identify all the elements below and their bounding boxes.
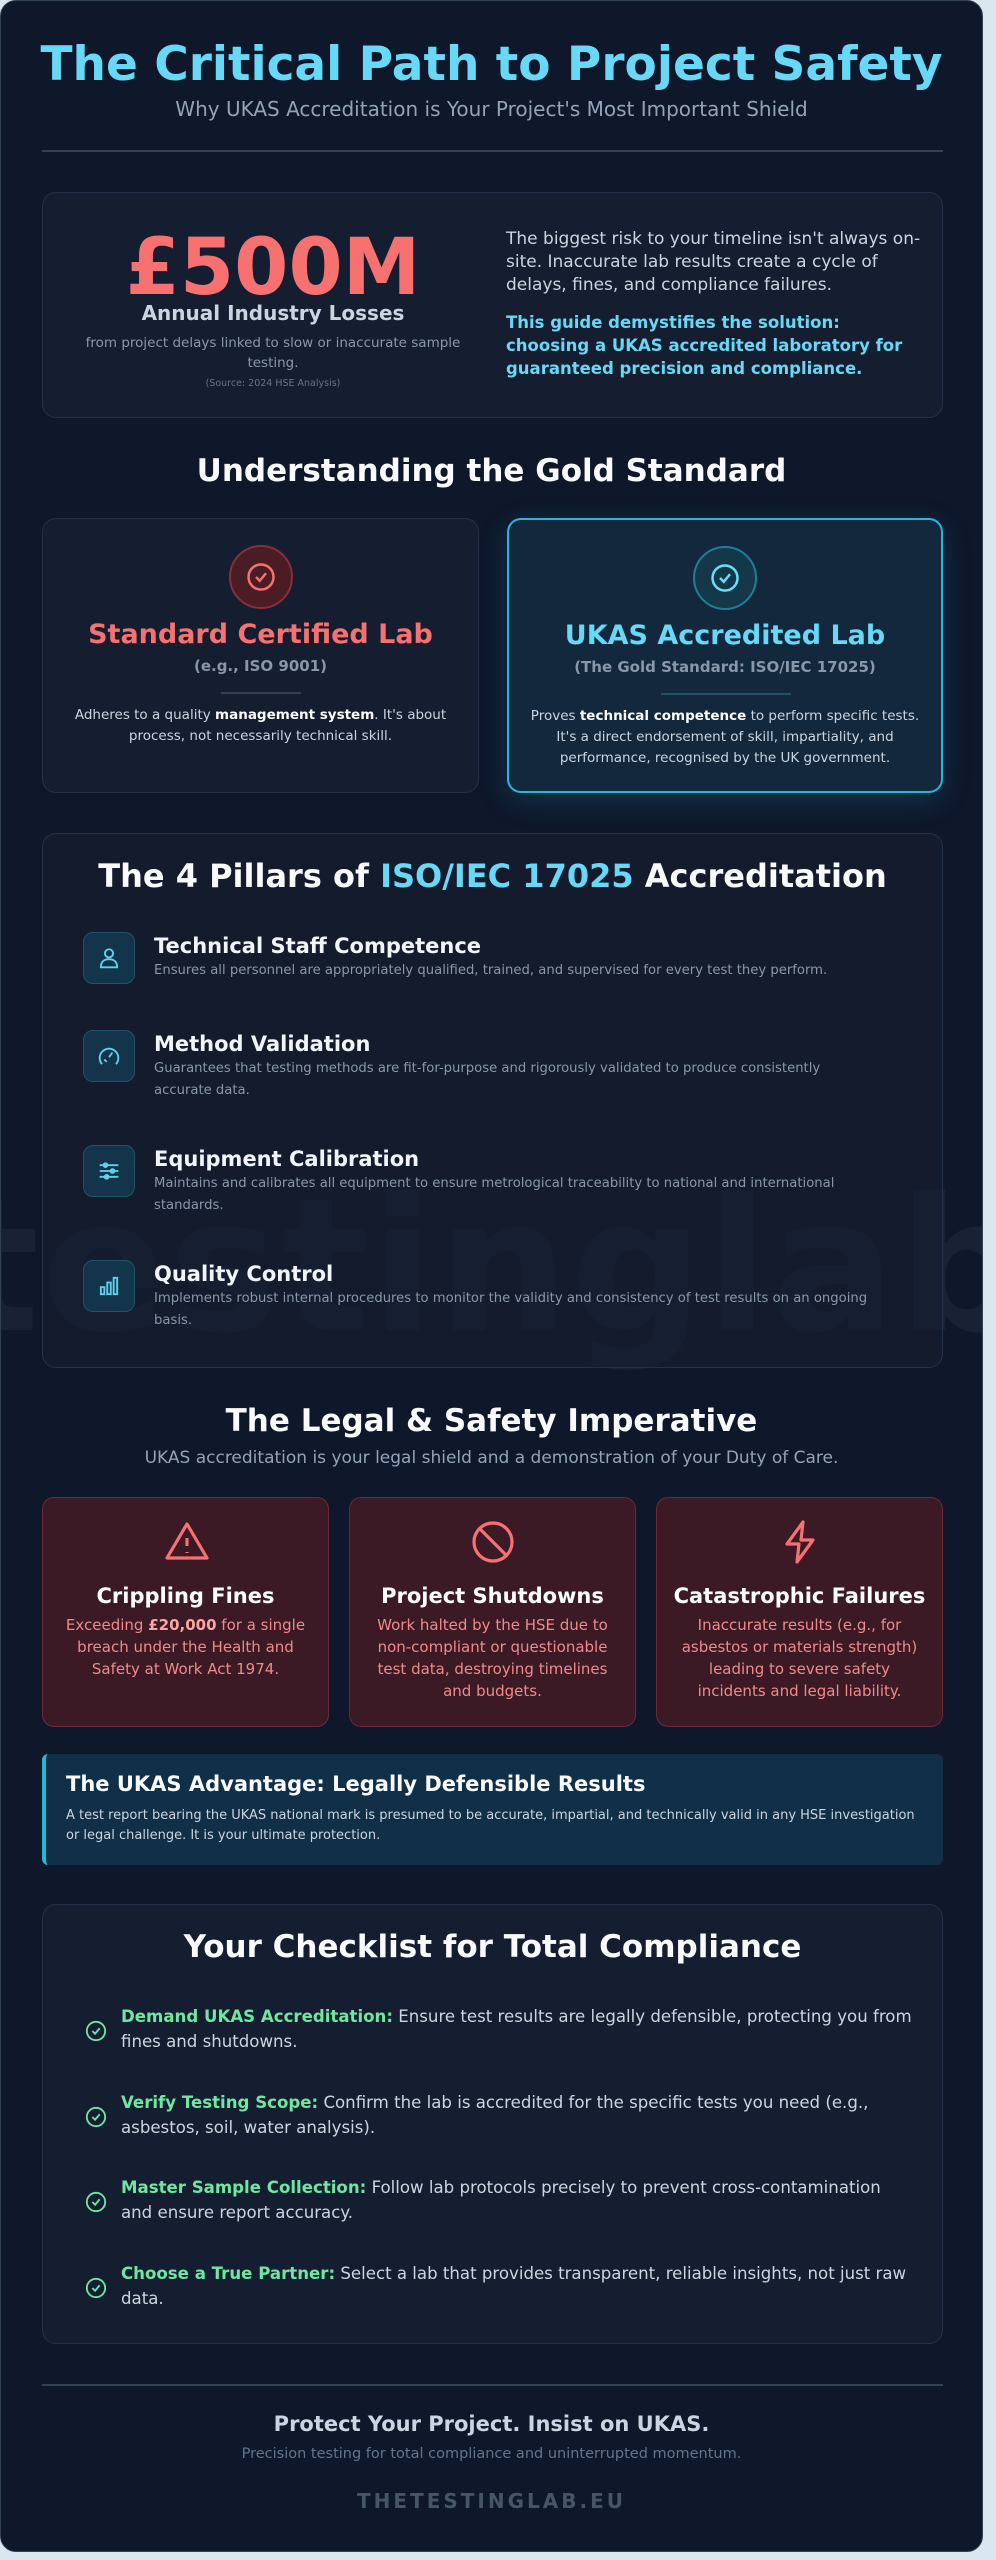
callout: UKAS advantage xyxy=(42,1754,943,1865)
heading: legal: The Legal & Safety Imperative xyxy=(226,1403,757,1439)
pillars heading: The 4 Pillars of ISO/IEC 17025 Accreditation xyxy=(98,857,887,895)
stat description: from project delays linked to slow or inaccurate sample testing. xyxy=(86,335,460,371)
stat: £500M: £500M xyxy=(126,223,420,313)
item 2: Verify Testing Scope: Confirm the lab is accredited for the specific tests you need (e.g., asbestos, soil, water analysis). xyxy=(121,2093,868,2137)
subtitle: Why UKAS Accreditation is Your Project's Most Important Shield xyxy=(175,97,808,121)
card: fines xyxy=(42,1497,329,1727)
icon: sliders xyxy=(83,1145,135,1197)
card: shutdowns: Project Shutdowns xyxy=(381,1584,604,1608)
pillar: staff xyxy=(83,932,827,984)
intro text: The biggest risk to your timeline isn't always on-site. Inaccurate lab results create a cycle of delays, fines, and compliance failures. xyxy=(506,229,920,295)
pillar: method xyxy=(83,1030,820,1098)
icon: lightning xyxy=(785,1520,815,1564)
card title: Standard Certified Lab xyxy=(88,619,433,650)
card: fines: Exceeding £20,000 for a single breach under the Health and Safety at Work Act 1974. xyxy=(66,1616,305,1678)
card title: UKAS Accredited Lab xyxy=(565,620,885,651)
source: (Source: 2024 HSE Analysis) xyxy=(206,378,340,389)
icon: red check xyxy=(229,545,293,609)
icon: gauge xyxy=(83,1030,135,1082)
pillar title: Technical Staff Competence xyxy=(154,934,481,958)
item 4: Choose a True Partner: Select a lab that provides transparent, reliable insights, not just raw data. xyxy=(121,2264,906,2308)
pillar title: Method Validation xyxy=(154,1032,370,1056)
pillar text: Maintains and calibrates all equipment to ensure metrological traceability to national and international standards. xyxy=(154,1176,834,1213)
icon: person xyxy=(83,932,135,984)
pillar: quality xyxy=(83,1260,867,1328)
card text: Adheres to a quality management system. It's about process, not necessarily technical skill. xyxy=(75,707,446,744)
icon: bars xyxy=(83,1260,135,1312)
heading: gold standard: Understanding the Gold Standard xyxy=(197,453,786,489)
icon: warning xyxy=(165,1522,209,1560)
panel: hero stat xyxy=(42,192,943,418)
card: failures: Catastrophic Failures xyxy=(674,1584,925,1608)
callout: UKAS advantage: The UKAS Advantage: Legally Defensible Results xyxy=(66,1772,645,1796)
card subtitle: (e.g., ISO 9001) xyxy=(194,657,327,675)
card: failures: Inaccurate results (e.g., for asbestos or materials strength) leading to severe safety incidents and legal liability. xyxy=(682,1616,917,1700)
icon: ban xyxy=(472,1521,514,1563)
card subtitle: (The Gold Standard: ISO/IEC 17025) xyxy=(574,658,876,676)
card: standard certified xyxy=(42,518,479,793)
pillar text: Guarantees that testing methods are fit-for-purpose and rigorously validated to produce consistently accurate data. xyxy=(154,1061,820,1098)
footer brand: THETESTINGLAB.EU xyxy=(357,2489,626,2513)
card: fines: Crippling Fines xyxy=(97,1584,274,1608)
panel: checklist xyxy=(42,1904,943,2344)
card: shutdowns: Work halted by the HSE due to non-compliant or questionable test data, destroying timelines and budgets. xyxy=(377,1616,608,1700)
panel: 4 pillars xyxy=(42,833,943,1368)
pillar title: Equipment Calibration xyxy=(154,1147,419,1171)
footer tagline: Protect Your Project. Insist on UKAS. xyxy=(274,2412,709,2436)
checklist heading: Your Checklist for Total Compliance xyxy=(184,1929,801,1965)
stat label: Annual Industry Losses xyxy=(142,301,404,325)
intro highlight: This guide demystifies the solution: choosing a UKAS accredited laboratory for guaranteed precision and compliance. xyxy=(506,313,902,378)
icon: cyan check xyxy=(693,546,757,610)
pillar title: Quality Control xyxy=(154,1262,333,1286)
legal subtitle: UKAS accreditation is your legal shield and a demonstration of your Duty of Care. xyxy=(145,1448,838,1468)
pillar text: Implements robust internal procedures to monitor the validity and consistency of test results on an ongoing basis. xyxy=(154,1291,867,1328)
pillar text: Ensures all personnel are appropriately qualified, trained, and supervised for every test they perform. xyxy=(154,963,827,978)
item 3: Master Sample Collection: Follow lab protocols precisely to prevent cross-contamination and ensure report accuracy. xyxy=(121,2178,881,2222)
card text: Proves technical competence to perform specific tests. It's a direct endorsement of skill, impartiality, and performance, recognised by the UK government. xyxy=(531,708,919,766)
card: shutdowns xyxy=(349,1497,636,1727)
footer subtext: Precision testing for total compliance and uninterrupted momentum. xyxy=(242,2446,741,2462)
callout: UKAS advantage: A test report bearing the UKAS national mark is presumed to be accurate, impartial, and technically valid in any HSE investigation or legal challenge. It is your ultimate protection. xyxy=(66,1808,915,1843)
pillar: equipment xyxy=(83,1145,834,1213)
card: UKAS accredited xyxy=(507,518,943,793)
title: The Critical Path to Project Safety xyxy=(40,37,943,92)
item 1: Demand UKAS Accreditation: Ensure test results are legally defensible, protecting you from fines and shutdowns. xyxy=(121,2007,912,2051)
card: failures xyxy=(656,1497,943,1727)
